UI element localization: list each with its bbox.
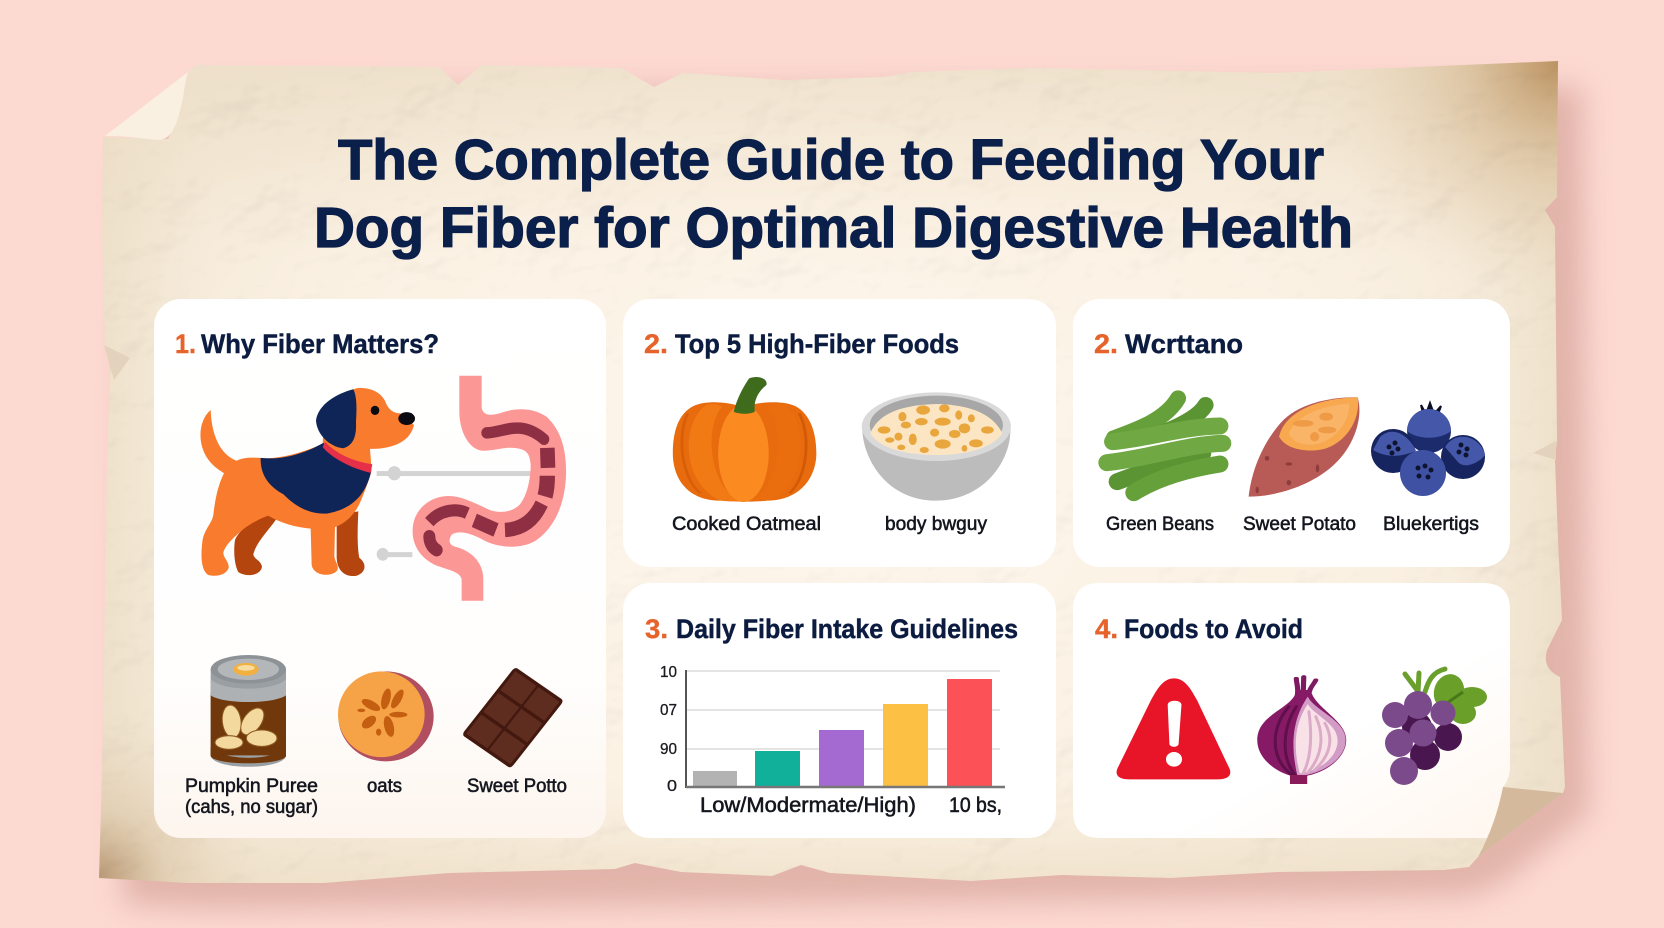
- heading: daily fiber intake guidelines: 3.: [645, 614, 668, 644]
- heading: why fiber matters: Why Fiber Matters?: [201, 329, 439, 359]
- bar chart: [660, 664, 1005, 795]
- label: sweet potato: Sweet Potato: [1243, 514, 1356, 535]
- heading: wcrttano: Wcrttano: [1125, 329, 1243, 359]
- axis labels: 10: [660, 664, 677, 681]
- title: [314, 128, 1353, 260]
- axis labels: 0: [667, 778, 677, 795]
- heading: daily fiber intake guidelines: Daily Fiber Intake Guidelines: [676, 614, 1018, 644]
- axis labels: 07: [660, 702, 677, 719]
- panel: foods to avoid: [1073, 583, 1510, 838]
- label: sweet potto: Sweet Potto: [467, 776, 567, 797]
- paper fold: top left corner: [105, 72, 188, 140]
- paper tear flaps: [104, 345, 1556, 460]
- label: pumpkin puree: Pumpkin Puree: [185, 776, 318, 797]
- chart caption: [700, 794, 1002, 817]
- bar: teal: [755, 751, 800, 787]
- paper fold: bottom right corner: [1478, 787, 1563, 857]
- chart caption: Low/Modermate/High): [700, 794, 916, 817]
- title: The Complete Guide to Feeding Your: [338, 128, 1324, 192]
- label: oats: oats: [367, 776, 402, 797]
- label: pumpkin puree: (cahs, no sugar): [185, 797, 318, 818]
- icon: chocolate bar: [462, 667, 564, 769]
- heading: top 5 high-fiber foods: 2.: [644, 329, 668, 359]
- icon: connector lines: [377, 466, 531, 561]
- panel: why fiber matters: [154, 299, 606, 838]
- heading: wcrttano: 2.: [1094, 329, 1118, 359]
- icon: oatmeal bowl: [862, 392, 1011, 501]
- bar: red: [947, 679, 992, 787]
- bar: yellow: [883, 704, 928, 787]
- axis labels: [660, 664, 677, 795]
- icon: green beans: [1107, 398, 1223, 493]
- bar: purple: [819, 730, 864, 787]
- axis labels: 90: [660, 741, 677, 758]
- label: cooked oatmeal: Cooked Oatmeal: [672, 514, 821, 535]
- icon: red onion: [1257, 677, 1346, 784]
- label: body bwguy: body bwguy: [885, 514, 987, 535]
- title: Dog Fiber for Optimal Digestive Health: [314, 196, 1353, 260]
- icon: pumpkin: [673, 377, 816, 502]
- panel: wcrttano: [1073, 299, 1510, 567]
- label: pumpkin puree: [185, 776, 318, 818]
- panel: daily fiber intake guidelines: [623, 583, 1056, 838]
- icon: sweet potato: [1249, 397, 1359, 497]
- icon: pumpkin puree can: [211, 655, 286, 767]
- panel: top 5 high-fiber foods: [623, 299, 1056, 567]
- icon: intestine: [413, 376, 566, 601]
- icon: grapes: [1382, 669, 1487, 785]
- bar: grey: [693, 771, 737, 787]
- heading: foods to avoid: 4.: [1095, 614, 1118, 644]
- heading: top 5 high-fiber foods: Top 5 High-Fiber Foods: [675, 329, 959, 359]
- heading: foods to avoid: Foods to Avoid: [1124, 614, 1303, 644]
- paper shadow: [123, 87, 1589, 909]
- label: bluekertigs: Bluekertigs: [1383, 514, 1479, 535]
- label: green beans: Green Beans: [1106, 514, 1214, 535]
- heading: why fiber matters: 1.: [175, 329, 196, 359]
- icon: sweet potato slice: [338, 671, 434, 761]
- icon: blueberries: [1371, 403, 1485, 496]
- chart caption: 10 bs,: [949, 794, 1002, 817]
- icon: dog: [200, 388, 415, 576]
- icon: warning triangle: [1117, 678, 1230, 779]
